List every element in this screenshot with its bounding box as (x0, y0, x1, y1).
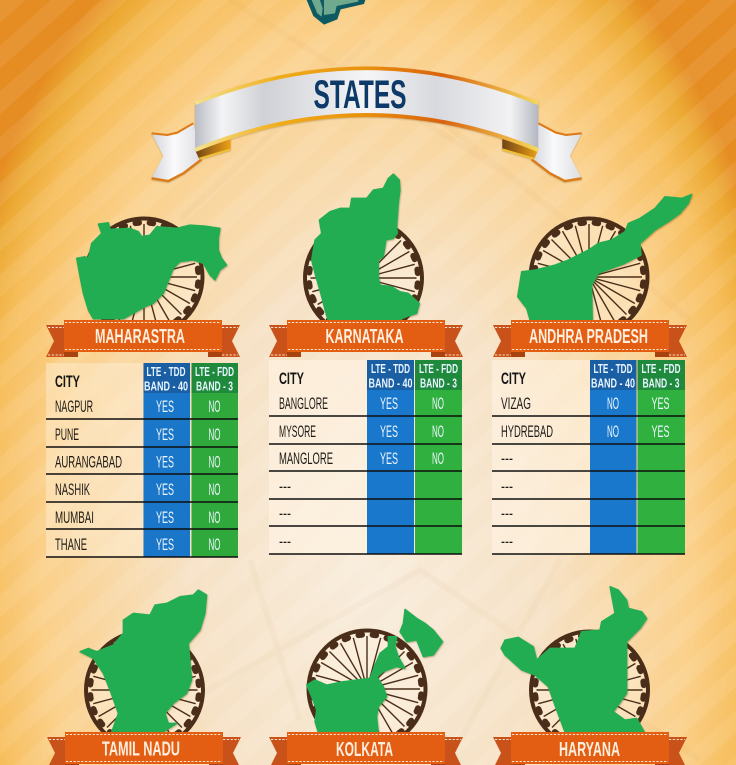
table: andhra pradesh: HYDREBAD (501, 422, 553, 441)
table: maharastra: BAND - 3 (196, 378, 233, 394)
table: maharastra: NO (208, 425, 220, 444)
table: karnataka: YES (380, 449, 398, 468)
ribbon: maharastra (46, 320, 240, 357)
table: karnataka: MANGLORE (279, 449, 333, 468)
table: karnataka: --- (279, 504, 291, 523)
table: andhra pradesh: YES (652, 394, 670, 413)
table: andhra pradesh: --- (501, 477, 513, 496)
icon: andhra pradesh map (518, 194, 692, 320)
icon: wheel (86, 218, 202, 336)
table: karnataka: --- (279, 477, 291, 496)
table: maharastra: YES (156, 535, 174, 554)
icon: wheel (530, 218, 648, 336)
table: andhra pradesh: VIZAG (501, 394, 531, 413)
ribbon: tamil nadu (47, 732, 241, 765)
table: karnataka: BANGLORE (279, 394, 328, 413)
table: maharastra: YES (156, 480, 174, 499)
table: andhra pradesh (492, 360, 685, 554)
icon: haryana map (501, 587, 647, 732)
table: maharastra: YES (156, 425, 174, 444)
panel: maharastra (46, 218, 240, 557)
table: karnataka: YES (380, 422, 398, 441)
icon: tamil nadu map (80, 590, 207, 732)
table: andhra pradesh: NO (607, 394, 619, 413)
panel: kolkata (269, 609, 463, 765)
panel: andhra pradesh (492, 194, 692, 554)
table: karnataka: MYSORE (279, 422, 316, 441)
table: maharastra: YES (156, 452, 174, 472)
panel: karnataka (269, 174, 463, 554)
icon: wheel (308, 630, 426, 748)
table: karnataka: NO (432, 394, 444, 413)
table: andhra pradesh: YES (652, 422, 670, 441)
ribbon: kolkata: KOLKATA (336, 739, 393, 761)
icon: wheel (86, 632, 203, 748)
table: maharastra: LTE - FDD (195, 364, 234, 379)
table: andhra pradesh: LTE - TDD (594, 361, 632, 376)
table: karnataka: CITY (279, 369, 304, 388)
icon: maharastra map (77, 223, 227, 319)
table: maharastra: CITY (55, 372, 80, 391)
table: maharastra: NO (208, 397, 220, 416)
table: maharastra (46, 363, 238, 557)
ribbon: karnataka (269, 320, 463, 357)
table: andhra pradesh: --- (501, 504, 513, 523)
table: andhra pradesh: BAND - 3 (642, 376, 680, 390)
icon: kolkata map (307, 609, 443, 733)
banner: states (152, 68, 582, 181)
table: andhra pradesh: --- (501, 532, 513, 551)
table: maharastra: NASHIK (55, 480, 90, 499)
table: andhra pradesh: --- (501, 449, 513, 468)
table: karnataka: BAND - 40 (368, 376, 412, 390)
ribbon: andhra pradesh: ANDHRA PRADESH (529, 326, 648, 348)
table: karnataka: LTE - FDD (419, 361, 458, 376)
icon: wheel (531, 632, 648, 748)
ribbon: kolkata (269, 732, 463, 765)
panel: tamil nadu (47, 590, 241, 765)
table: maharastra: NAGPUR (55, 397, 93, 416)
table: maharastra: YES (156, 508, 174, 527)
icon: karnataka map (312, 174, 419, 321)
table: karnataka: NO (432, 449, 444, 468)
table: karnataka: NO (432, 422, 444, 441)
table: maharastra: NO (208, 452, 220, 472)
table: maharastra: BAND - 40 (144, 378, 188, 394)
table: andhra pradesh: CITY (501, 369, 526, 388)
icon: top map fragment (307, 0, 365, 25)
table: maharastra: THANE (55, 535, 87, 554)
table: maharastra: PUNE (55, 425, 79, 444)
table: maharastra: LTE - TDD (146, 364, 186, 379)
panel: haryana (493, 587, 687, 765)
table: andhra pradesh: LTE - FDD (642, 361, 680, 376)
ribbon: andhra pradesh (493, 320, 687, 357)
title: STATES (314, 73, 406, 117)
ribbon: karnataka: KARNATAKA (326, 326, 404, 348)
icon: wheel (305, 220, 422, 336)
ribbon: haryana: HARYANA (559, 739, 620, 761)
table: maharastra: NO (208, 535, 220, 554)
table: karnataka: BAND - 3 (420, 376, 457, 390)
table: maharastra: YES (156, 397, 174, 416)
table: andhra pradesh: NO (607, 422, 619, 441)
table: karnataka (269, 360, 462, 554)
table: maharastra: AURANGABAD (55, 452, 122, 472)
ribbon: maharastra: MAHARASTRA (95, 326, 185, 348)
table: maharastra: MUMBAI (55, 508, 94, 527)
table: andhra pradesh: BAND - 40 (591, 376, 635, 390)
table: maharastra: NO (208, 480, 220, 499)
table: karnataka: --- (279, 532, 291, 551)
ribbon: haryana (493, 732, 687, 765)
table: karnataka: YES (380, 394, 398, 413)
ribbon: tamil nadu: TAMIL NADU (102, 738, 180, 760)
table: karnataka: LTE - TDD (371, 361, 410, 376)
table: maharastra: NO (208, 508, 220, 527)
